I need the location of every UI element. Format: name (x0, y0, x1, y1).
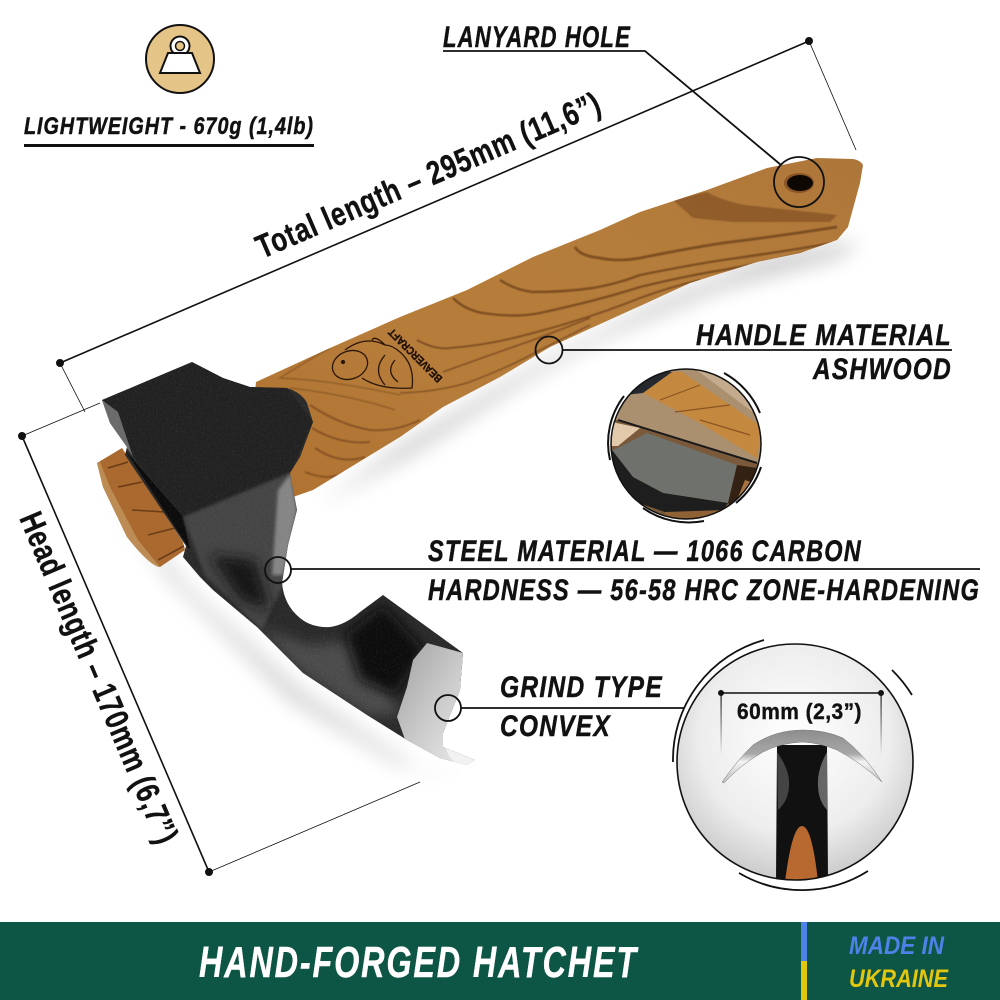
wedge (97, 448, 185, 567)
dimension line (18, 403, 420, 876)
hatchet seen head-on (776, 745, 828, 882)
weight underline (24, 144, 314, 147)
callout: grind type: CONVEX (500, 710, 611, 743)
inset arcs (673, 640, 912, 890)
stone (612, 433, 737, 503)
banner title: HAND-FORGED HATCHET (199, 938, 638, 987)
lanyard hole (784, 173, 814, 193)
width dimension (718, 690, 884, 755)
dimension line (56, 38, 856, 412)
forged scale texture (104, 363, 458, 736)
poll bevel (102, 400, 133, 457)
weight feature (24, 25, 314, 147)
weight text: LIGHTWEIGHT - 670g (1,4lb) (24, 113, 314, 140)
callout: grind type: GRIND TYPE (500, 671, 663, 704)
total length dimension (56, 38, 856, 412)
curved bevel (722, 730, 882, 783)
brand text: BEAVERCRAFT (386, 326, 445, 384)
callout: grind type (435, 671, 684, 743)
beaver sketch (328, 338, 412, 388)
ukraine text: UKRAINE (849, 965, 949, 993)
inset arcs (608, 373, 761, 522)
polished bevel (397, 643, 475, 770)
callout: handle material (536, 319, 952, 386)
hammered lower neck (257, 627, 400, 715)
callout: steel material (265, 535, 980, 607)
callout: steel material: STEEL MATERIAL — 1066 CARBON (428, 535, 862, 568)
footer banner (0, 922, 1000, 1000)
ukraine flag divider (801, 922, 807, 1000)
hatchet photo (95, 150, 880, 770)
total length text: Total length – 295mm (11,6”) (250, 84, 606, 265)
hatchet drop shadow (110, 240, 860, 775)
callout: handle material: ASHWOOD (812, 353, 952, 386)
head length text: Head length – 170mm (6,7”) (13, 506, 186, 849)
shadow behind wedge (125, 450, 190, 550)
made in text: MADE IN (849, 932, 945, 960)
hatchet head (95, 355, 485, 770)
maker's mark on handle (328, 326, 445, 388)
callout: handle material: HANDLE MATERIAL (696, 319, 952, 352)
upper poll dark area (102, 362, 313, 517)
handle wood grain (280, 192, 837, 477)
hammered grey cheek (183, 473, 296, 630)
width text: 60mm (2,3”) (737, 699, 862, 724)
callout: lanyard hole (443, 21, 824, 207)
inset: blade width top view (673, 640, 913, 890)
callout: lanyard hole: LANYARD HOLE (443, 21, 631, 54)
icon: weight (146, 25, 214, 93)
hatchet handle (256, 158, 863, 496)
head length dimension (13, 403, 420, 876)
inset photo: steel and wood detail (607, 368, 762, 524)
